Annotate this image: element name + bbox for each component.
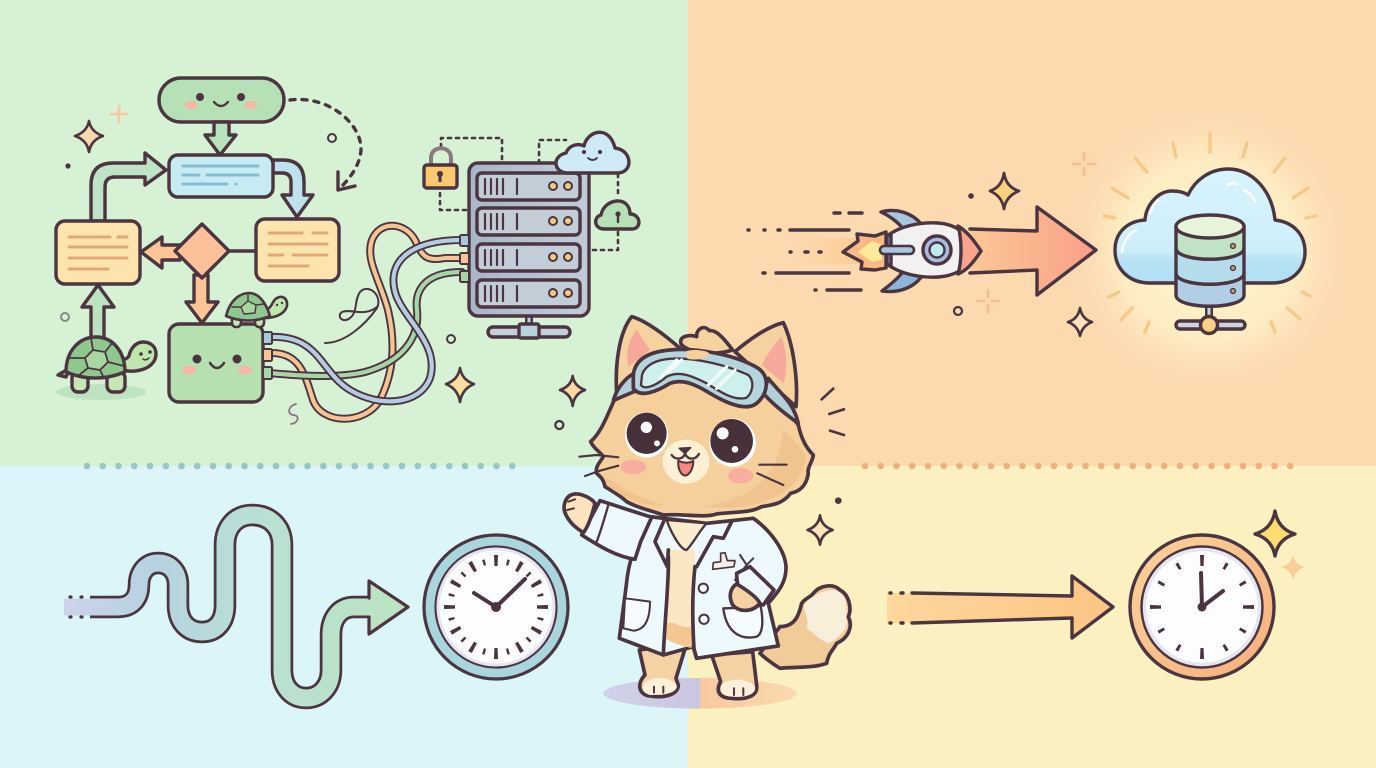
box: yellow right — [256, 219, 339, 281]
muzzle — [663, 440, 709, 484]
dotted divider left — [87, 463, 513, 469]
arrow: diamond to left box — [141, 237, 180, 268]
panel: fast cloud pipeline — [748, 100, 1360, 400]
squiggle wire — [325, 289, 378, 343]
floor shadow — [603, 678, 797, 709]
cable: orange — [270, 226, 462, 419]
goggle strap — [613, 373, 798, 423]
icon: padlock — [424, 148, 457, 188]
icon: big turtle — [56, 337, 156, 400]
surprise ticks — [822, 389, 844, 435]
panel: fast path — [887, 511, 1305, 679]
arrow: direct arrow — [887, 576, 1113, 638]
ring — [328, 134, 336, 142]
rocket exhaust trail — [790, 238, 885, 264]
hand on hip arm — [730, 567, 774, 610]
tail — [760, 586, 850, 668]
sparkle — [808, 515, 833, 545]
ear right inner — [762, 337, 786, 383]
cloud glow — [1060, 100, 1360, 400]
icon: server rack stand — [488, 316, 570, 338]
ear left — [616, 317, 680, 393]
fur shading — [607, 430, 807, 508]
box: yellow left — [56, 221, 140, 284]
icon: small turtle — [226, 293, 287, 327]
icon: smiling cloud — [556, 132, 629, 173]
head — [591, 367, 813, 516]
sparkle — [75, 121, 103, 152]
plus mark — [111, 106, 127, 122]
dot — [835, 497, 842, 504]
pointing arm — [564, 494, 652, 559]
icon: rocket — [843, 211, 981, 292]
whiskers — [579, 455, 787, 485]
icon: slow clock — [424, 535, 568, 679]
icon: cloud — [1115, 169, 1305, 283]
sparkle — [560, 376, 585, 406]
arrow: green curved up to process — [91, 153, 166, 221]
sparkle — [1068, 308, 1092, 336]
icon: database cylinder — [1176, 215, 1244, 306]
eye right — [709, 419, 756, 467]
sparkle — [990, 173, 1019, 209]
box: blue process — [169, 155, 273, 197]
icon: server rack — [460, 163, 589, 316]
panel: tangled server — [424, 132, 639, 338]
sparkle — [1255, 511, 1295, 556]
icon: small locked cloud — [596, 201, 639, 229]
ring — [555, 421, 563, 429]
plus mark — [977, 153, 1095, 312]
ear left inner — [627, 330, 650, 367]
cable: blue — [270, 240, 462, 401]
icon: decision diamond — [175, 224, 229, 278]
dot — [65, 163, 71, 169]
dot — [968, 193, 974, 199]
cable: green — [270, 272, 462, 376]
head tuft — [681, 328, 733, 353]
connector: diamond to yellow box — [229, 249, 256, 253]
cheeks — [621, 460, 753, 483]
light rays — [1104, 133, 1316, 332]
arrow: winding path — [64, 515, 408, 698]
ear right — [735, 323, 797, 407]
icon: smiling start pill — [159, 78, 284, 122]
speed lines — [748, 213, 862, 290]
icon: smiling green box — [169, 324, 272, 402]
goggles — [633, 349, 766, 407]
nose and mouth — [672, 448, 699, 476]
arrow: dashed loop — [290, 99, 361, 190]
sparkle — [446, 368, 474, 402]
arrow: rocket speed arrow — [970, 207, 1096, 295]
ring — [954, 307, 962, 315]
arrow: pill to process — [205, 122, 236, 155]
decor: left panel sparkles — [61, 106, 474, 402]
cables between box and server — [270, 226, 462, 424]
arrow: up to left box — [82, 285, 114, 338]
eye left — [625, 412, 668, 458]
arrow: diamond down to green box — [186, 275, 218, 323]
icon: database stand — [1176, 303, 1245, 334]
arrow: blue curved down — [273, 160, 313, 217]
lab coat — [619, 517, 786, 658]
dotted divider right — [865, 463, 1291, 469]
panel: tangled flowchart — [56, 78, 462, 424]
dashed security links — [440, 138, 618, 250]
panel: slow path — [64, 515, 568, 698]
icon: fast clock — [1130, 535, 1274, 679]
ring — [447, 335, 455, 343]
character: cat scientist — [555, 317, 850, 709]
ring — [61, 313, 69, 321]
sparkle — [1281, 555, 1305, 580]
legs — [639, 643, 757, 699]
